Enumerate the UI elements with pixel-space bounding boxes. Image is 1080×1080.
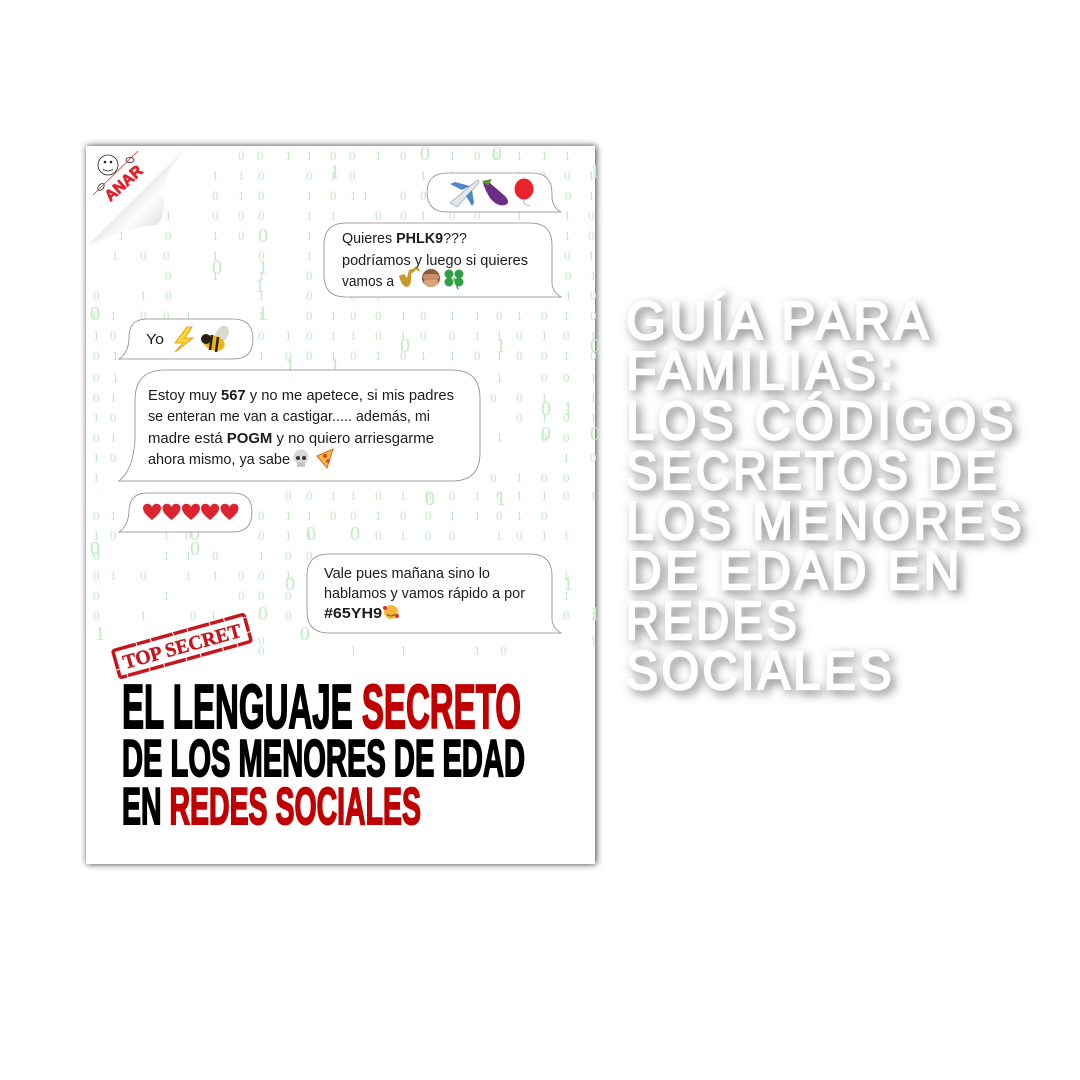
matrix binary code background: 0101001 bbox=[93, 608, 596, 623]
chat bubble: Estoy muy 567 bbox=[119, 370, 480, 481]
matrix binary code background: 1010 bbox=[93, 450, 596, 465]
matrix digits large: 00 bbox=[90, 538, 200, 560]
matrix digits large: 10 bbox=[255, 275, 410, 297]
matrix digits large: 11 bbox=[330, 161, 600, 183]
chat bubble: Quieres PHLK9: podríamos y luego si quieres bbox=[342, 252, 528, 269]
matrix binary code background: 01100101011010010 bbox=[93, 348, 596, 363]
matrix binary code background: 00110010100111 bbox=[238, 148, 570, 163]
icon: five red hearts bbox=[143, 504, 238, 520]
title line 1: EL LENGUAJE SECRETO bbox=[122, 673, 521, 742]
matrix binary code background: 010100110 bbox=[93, 288, 596, 303]
message text: Vale pues mañana sino lo bbox=[324, 565, 490, 582]
matrix binary code background: 101001101001011 bbox=[93, 528, 570, 543]
matrix digits large: 01 bbox=[425, 488, 506, 510]
matrix digits large: 00 bbox=[541, 423, 600, 445]
logo: smiley bbox=[97, 155, 134, 192]
folded corner bbox=[86, 146, 188, 246]
matrix binary code background: 01100 bbox=[93, 430, 570, 445]
chat bubble: airplane eggplant balloon bbox=[427, 173, 561, 212]
matrix binary code background: 010011 bbox=[93, 390, 596, 405]
icon: lightning bolt bbox=[175, 327, 193, 352]
icon: airplane bbox=[450, 180, 479, 207]
matrix digits large: 10 bbox=[95, 623, 310, 645]
chat bubble: Vale pues: hablamos y vamos rápido a por bbox=[324, 585, 525, 602]
matrix digits large: 00 bbox=[258, 225, 410, 247]
matrix binary code background: 00110100101101 bbox=[285, 488, 596, 503]
matrix binary code background: 0110100 bbox=[93, 548, 312, 563]
chat bubble: Yo bbox=[119, 319, 253, 359]
matrix binary code background: 100101 bbox=[93, 410, 596, 425]
chat bubble: Estoy muy 567: ahora mismo, ya sabe bbox=[148, 451, 290, 468]
matrix binary code background: 0100110100101101010 bbox=[93, 308, 596, 323]
chat bubble: Vale pues: #65YH9 bbox=[324, 605, 382, 622]
matrix digits large: 000 bbox=[190, 523, 360, 545]
message text: Estoy muy 567 y no me apetece, si mis padres bbox=[148, 387, 454, 404]
chat bubble: Estoy muy 567: se enteran me van a castigar..... además, mi bbox=[148, 408, 430, 425]
heading: guía para familias: FAMILIAS: bbox=[626, 341, 897, 401]
matrix digits large: 00 bbox=[420, 143, 502, 165]
matrix digits large: 01 bbox=[258, 603, 600, 625]
matrix binary code background: 010001 bbox=[93, 588, 570, 603]
icon: eggplant bbox=[482, 179, 508, 205]
chat bubble: Vale pues bbox=[307, 554, 561, 633]
message text: Yo bbox=[146, 331, 164, 348]
icon: bee bbox=[201, 323, 232, 354]
matrix digits large bbox=[90, 143, 600, 645]
matrix digits large: 01 bbox=[285, 573, 573, 595]
heading: guía para familias: SECRETOS DE bbox=[626, 441, 1000, 501]
matrix binary code background: 10010110100110101 bbox=[93, 328, 596, 343]
icon: skull bbox=[294, 450, 308, 467]
matrix digits large: 10 bbox=[90, 303, 268, 325]
heading: guía para familias: SOCIALES bbox=[626, 641, 895, 701]
matrix binary code background: 10100 bbox=[93, 470, 570, 485]
matrix binary code background: 1100101011001 bbox=[212, 168, 594, 183]
matrix binary code background: 011001 bbox=[93, 370, 596, 385]
icon: smiling face with hearts bbox=[383, 605, 399, 619]
matrix binary code background: 100101110001 bbox=[112, 248, 594, 263]
poster sheet bbox=[86, 146, 595, 864]
matrix binary code background bbox=[93, 148, 596, 658]
matrix digits large: 01 bbox=[212, 257, 268, 279]
icon: pizza bbox=[317, 449, 333, 468]
heading: guía para familias: REDES bbox=[626, 591, 800, 651]
matrix binary code background: 1010110010 bbox=[118, 228, 594, 243]
matrix binary code background: 0110101 bbox=[165, 268, 596, 283]
chat bubble: Estoy muy 567: madre está POGM y no quiero arriesgarme bbox=[148, 430, 434, 447]
chat bubble: hearts bbox=[119, 493, 252, 532]
panel: poster bbox=[86, 143, 600, 864]
icon: see-no-evil monkey bbox=[422, 269, 440, 287]
icon: balloon bbox=[514, 178, 534, 206]
matrix binary code background: 010110010011010 bbox=[93, 508, 548, 523]
matrix digits large: 11 bbox=[285, 355, 340, 377]
icon: clover bbox=[444, 270, 464, 289]
matrix digits large: 010 bbox=[400, 335, 600, 357]
stamp: top secret: TOP SECRET bbox=[121, 620, 245, 674]
chat bubble: Quieres PHLK9: vamos a bbox=[342, 273, 395, 290]
matrix digits large: 01 bbox=[541, 398, 573, 420]
matrix binary code background: 0101100101 bbox=[93, 568, 570, 583]
heading: guía para familias bbox=[626, 291, 1025, 701]
heading: guía para familias: DE EDAD EN bbox=[626, 541, 963, 601]
heading: guía para familias: LOS MENORES bbox=[626, 491, 1025, 551]
matrix binary code background: 0101 bbox=[175, 633, 596, 648]
matrix binary code background: 01010110011001 bbox=[212, 188, 594, 203]
logo: ANAR wordmark: ANAR bbox=[102, 162, 146, 205]
title line 3: EN REDES SOCIALES bbox=[122, 778, 421, 836]
matrix binary code background: 01110 bbox=[258, 643, 506, 658]
message text: Quieres PHLK9??? bbox=[342, 230, 467, 247]
chat bubble: Quieres PHLK9 bbox=[324, 223, 561, 297]
poster title bbox=[122, 673, 525, 836]
heading: guía para familias: LOS CÓDIGOS bbox=[626, 391, 1017, 451]
page curl with ANAR logo bbox=[86, 146, 188, 246]
title line 2: DE LOS MENORES DE EDAD bbox=[122, 730, 525, 788]
matrix binary code background: 10001100100110 bbox=[165, 208, 594, 223]
heading: guía para familias: GUÍA PARA bbox=[626, 291, 932, 351]
icon: saxophone bbox=[399, 267, 420, 287]
